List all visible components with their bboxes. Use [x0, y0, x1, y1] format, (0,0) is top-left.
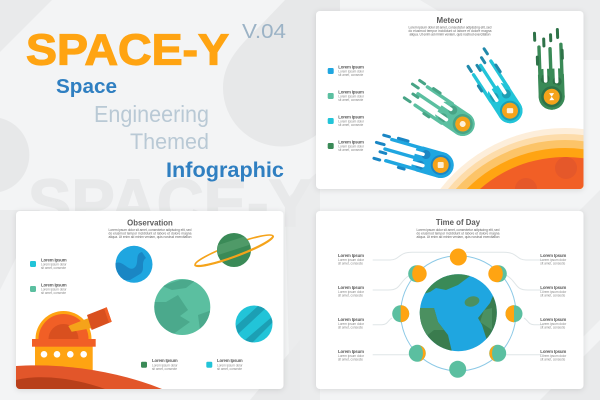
- description: observation: [108, 228, 192, 239]
- label: right 2: sit amet, consecte: [540, 294, 566, 298]
- legend: cyan: Lorem Ipsum: [338, 114, 364, 120]
- description: meteor: Lorem ipsum dolor sit amet, consectetur adipiscing elit, sed: [408, 26, 492, 30]
- label: left 4: sit amet, consecte: [338, 357, 363, 361]
- moon: lower left: [409, 345, 426, 362]
- label: left 4: [338, 349, 365, 361]
- description: meteor: [408, 26, 492, 36]
- legend: blue: sit amet, consecte: [338, 73, 364, 77]
- label: right 1: Lorem ipsum dolor: [540, 258, 567, 262]
- subtitle: Themed: Themed: [130, 129, 209, 154]
- moon: new bottom: [449, 361, 466, 378]
- description: time of day: Lorem ipsum dolor sit amet, consectetur adipiscing elit, sed: [416, 228, 500, 232]
- legend: teal: [30, 282, 68, 295]
- label: left 1: Lorem ipsum dolor: [338, 258, 365, 262]
- legend: green: Lorem ipsum dolor: [338, 145, 365, 149]
- legend: blue: Lorem Ipsum: [338, 64, 364, 70]
- subtitle: Space: Space: [56, 76, 117, 98]
- label: right 3: Lorem ipsum dolor: [540, 322, 567, 326]
- label: left 2: Lorem Ipsum: [338, 285, 364, 290]
- legend: teal: [328, 90, 365, 102]
- label: left 1: sit amet, consecte: [338, 262, 363, 266]
- label: right 3: Lorem Ipsum: [540, 317, 566, 322]
- legend: cyan: Lorem ipsum dolor: [41, 263, 68, 267]
- meteor: blue: [371, 133, 457, 182]
- description: time of day: [416, 228, 500, 239]
- moon: lower right: [489, 345, 506, 362]
- label: left 4: Lorem ipsum dolor: [338, 354, 365, 358]
- legend: cyan bottom: Lorem Ipsum: [217, 358, 243, 363]
- legend: cyan bottom: [206, 358, 244, 371]
- legend: teal: Lorem ipsum dolor: [41, 288, 68, 292]
- label: left 4: Lorem Ipsum: [338, 349, 364, 354]
- earth: [420, 274, 497, 352]
- legend: cyan: sit amet, consecte: [41, 266, 66, 270]
- panel: meteor: [316, 11, 584, 189]
- heading: time of day: Time of Day: [436, 218, 481, 227]
- label: left 1: Lorem Ipsum: [338, 253, 364, 258]
- legend: green: sit amet, consecte: [338, 148, 364, 152]
- legend: green: [328, 140, 365, 152]
- heading: observation: Observation: [127, 218, 173, 228]
- legend: cyan: Lorem Ipsum: [41, 258, 67, 262]
- legend: green: Lorem ipsum dolor: [152, 363, 179, 367]
- version label: V.04: [242, 21, 286, 43]
- heading: meteor: Meteor: [436, 16, 462, 25]
- sun: [440, 128, 584, 189]
- label: left 3: Lorem Ipsum: [338, 317, 364, 322]
- legend: teal: sit amet, consecte: [41, 291, 66, 295]
- legend: teal: sit amet, consecte: [338, 98, 364, 102]
- legend: cyan bottom: sit amet, consecte: [217, 367, 242, 371]
- panel: observation: [16, 211, 284, 389]
- label: left 2: sit amet, consecte: [338, 294, 363, 298]
- description: observation: aliqua. Ut enim ad minim veniam, quis nostrud exercitation: [108, 235, 192, 239]
- label: right 1: [540, 253, 567, 266]
- planet: teal: [154, 279, 212, 335]
- label: left 2: [338, 285, 365, 298]
- moon: full sun top: [450, 248, 467, 266]
- label: left 3: [338, 317, 365, 330]
- connector lines: [373, 252, 544, 355]
- label: right 4: [540, 349, 567, 361]
- description: time of day: aliqua. Ut enim ad minim veniam, quis nostrud exercitation: [416, 235, 500, 239]
- label: right 2: Lorem Ipsum: [540, 285, 566, 290]
- description: observation: Lorem ipsum dolor sit amet, consectetur adipiscing elit, sed: [108, 228, 192, 232]
- meteor: teal: [402, 77, 480, 141]
- title: SPACE-Y: SPACE-Y: [26, 26, 229, 74]
- label: right 4: Lorem ipsum dolor: [540, 354, 567, 358]
- description: meteor: aliqua. Ut enim ad minim veniam, quis nostrud exercitation: [410, 32, 491, 36]
- subtitle: Engineering: Engineering: [94, 101, 209, 127]
- label: right 4: sit amet, consecte: [540, 357, 566, 361]
- legend: green: sit amet, consecte: [152, 367, 177, 371]
- legend: blue: Lorem ipsum dolor: [338, 70, 365, 74]
- legend: green: [141, 358, 179, 371]
- moon: upper right: [488, 265, 507, 282]
- legend: cyan bottom: Lorem ipsum dolor: [217, 363, 244, 367]
- label: left 3: Lorem ipsum dolor: [338, 322, 365, 326]
- label: right 2: Lorem ipsum dolor: [540, 290, 567, 294]
- planet: blue: [114, 246, 152, 283]
- meteor: cyan: [463, 48, 528, 128]
- meteor: green: [534, 29, 565, 110]
- legend: teal: Lorem Ipsum: [338, 90, 364, 94]
- subtitle: Infographic: Infographic: [166, 159, 284, 182]
- planet: cyan: [236, 306, 273, 343]
- legend: cyan: Lorem ipsum dolor: [338, 120, 365, 124]
- moon: right: [506, 305, 522, 322]
- label: left 3: sit amet, consecte: [338, 326, 363, 330]
- planet: ringed green: [194, 233, 274, 268]
- description: meteor: do eiusmod tempor incididunt ut labore et dolore magna: [408, 29, 492, 33]
- legend: cyan: [328, 114, 365, 127]
- legend: blue: [328, 64, 365, 77]
- label: right 3: [540, 317, 567, 330]
- label: right 1: Lorem Ipsum: [540, 253, 566, 258]
- moon: upper left: [408, 265, 427, 282]
- label: left 1: [338, 253, 365, 266]
- description: time of day: do eiusmod tempor incididunt ut labore et dolore magna: [416, 232, 500, 236]
- legend: cyan: [30, 258, 68, 270]
- orbit ring: [401, 256, 516, 371]
- label: left 2: Lorem ipsum dolor: [338, 290, 365, 294]
- panel: time of day: [316, 211, 584, 389]
- label: right 3: sit amet, consecte: [540, 326, 566, 330]
- legend: green: Lorem Ipsum: [152, 358, 178, 363]
- label: right 2: [540, 285, 567, 298]
- watermark text: SPACE-Y: [28, 166, 312, 241]
- legend: cyan: sit amet, consecte: [338, 123, 364, 127]
- label: right 1: sit amet, consecte: [540, 262, 566, 266]
- telescope: [68, 307, 112, 332]
- label: right 4: Lorem Ipsum: [540, 349, 566, 354]
- legend: teal: Lorem ipsum dolor: [338, 95, 365, 99]
- legend: teal: Lorem Ipsum: [41, 282, 67, 288]
- description: observation: do eiusmod tempor incididunt ut labore et dolore magna: [108, 232, 192, 236]
- legend: green: Lorem Ipsum: [338, 140, 364, 144]
- observatory: [16, 307, 162, 389]
- moon: left: [392, 305, 409, 322]
